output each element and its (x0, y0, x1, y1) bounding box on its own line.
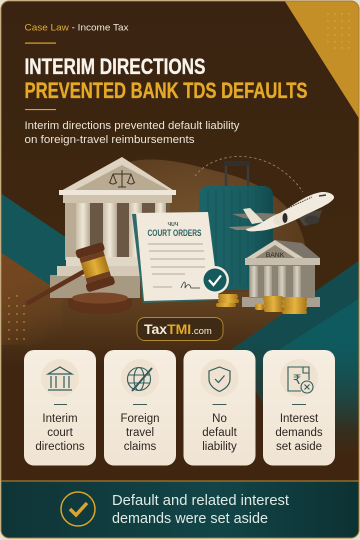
title: INTERIM DIRECTIONS (24, 54, 206, 79)
hero backdrop (2, 160, 306, 348)
subtitle (24, 120, 240, 146)
icon: shield check (209, 367, 230, 392)
card: interest demands set aside: Interest (280, 413, 319, 425)
card: no default liability: default (202, 427, 238, 439)
illustration: court order document (132, 212, 229, 303)
card: foreign travel claims (104, 350, 176, 466)
gold corner (284, 0, 360, 120)
logo badge (137, 318, 223, 340)
subtitle: Interim directions prevented default liability (24, 120, 240, 132)
illustration: airplane (228, 192, 334, 231)
card: foreign travel claims: Foreign (120, 413, 160, 425)
subtitle: on foreign-travel reimbursements (24, 134, 194, 146)
card: interim court directions: Interim (42, 413, 78, 425)
illustration: coins (216, 294, 307, 314)
icon: court building (48, 367, 72, 390)
card: no default liability: liability (202, 441, 237, 453)
title (25, 58, 307, 98)
icon: rupee document cancelled (288, 367, 313, 393)
card: interim court directions (24, 350, 96, 466)
card: foreign travel claims: travel (126, 427, 154, 439)
card: interest demands set aside: ₹ (293, 372, 301, 387)
card: interest demands set aside (263, 350, 335, 466)
illustration: bank: BANK (266, 252, 285, 259)
eyebrow: Case Law - Income Tax (24, 22, 129, 32)
card: interest demands set aside: demands (275, 427, 323, 439)
card: no default liability (184, 350, 256, 466)
conclusion banner: Default and related interest (112, 493, 289, 509)
lower section with cards backdrop (232, 261, 358, 443)
illustration: courthouse (50, 157, 176, 298)
illustration: court order document: COURT ORDERS (148, 228, 202, 239)
logo badge: TaxTMI.com (144, 321, 212, 337)
card: no default liability: No (212, 413, 227, 425)
conclusion banner (0, 480, 360, 540)
illustration: court order document: ЧUЧ (168, 222, 179, 228)
card: interest demands set aside: set aside (276, 441, 322, 453)
card: interim court directions: court (47, 427, 74, 439)
illustration: bank (242, 240, 320, 307)
icon: check circle (61, 492, 95, 526)
illustration: suitcase (199, 161, 273, 290)
conclusion banner: demands were set aside (112, 511, 268, 527)
card: foreign travel claims: claims (124, 441, 157, 453)
card: interim court directions: directions (35, 441, 85, 453)
icon: globe and plane (128, 368, 152, 391)
illustration: gavel (28, 242, 132, 314)
icon: scales (109, 170, 135, 187)
icon: approval badge (204, 266, 229, 294)
